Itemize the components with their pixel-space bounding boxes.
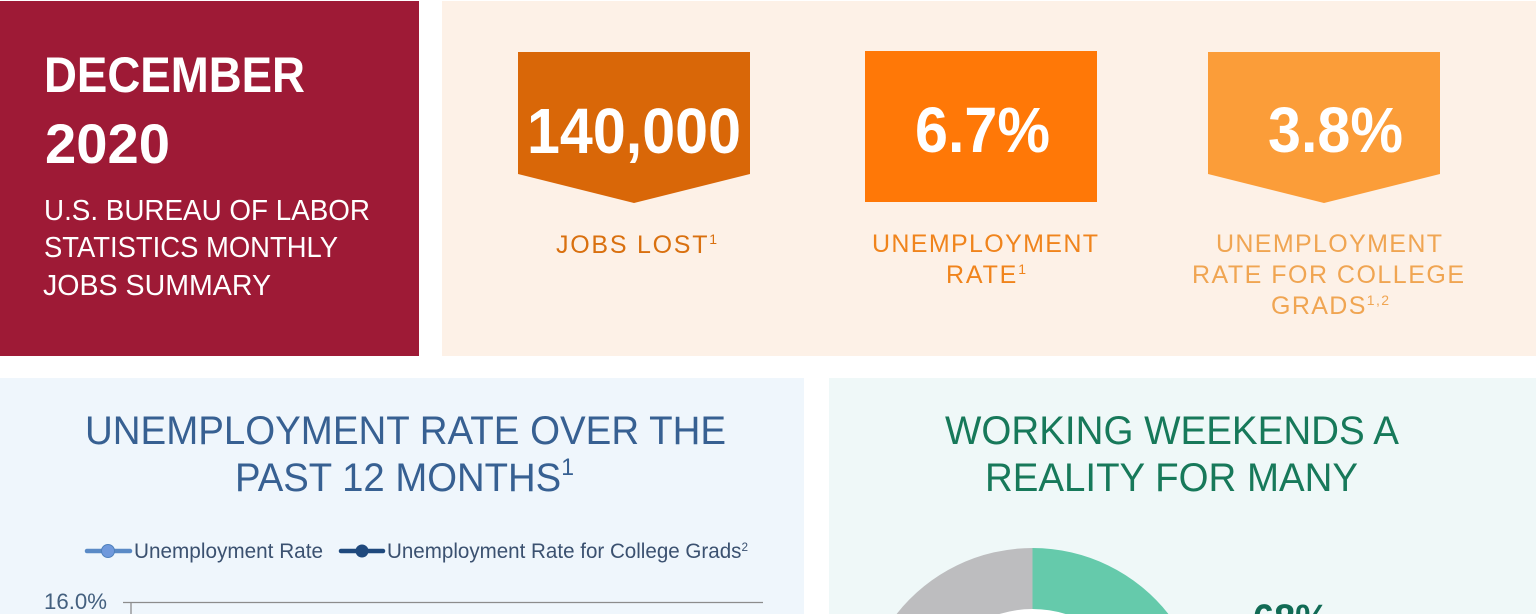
heading: December 2020: 2020 <box>45 112 170 175</box>
stat: jobs lost: 1 <box>709 231 717 247</box>
stat: unemployment rate: UNEMPLOYMENT <box>872 230 1098 258</box>
stat: jobs lost <box>518 52 750 259</box>
heading: working weekends a reality for many: WORKING WEEKENDS A <box>945 409 1399 453</box>
stat: unemployment rate for college grads: 1,2 <box>1367 292 1389 308</box>
heading: December 2020 <box>44 47 305 175</box>
legend: unemployment rate: Unemployment Rate <box>134 540 323 563</box>
text block: source description: U.S. BUREAU OF LABOR <box>44 195 370 227</box>
text block: source description: JOBS SUMMARY <box>43 270 271 302</box>
panel: key statistics <box>442 1 1536 356</box>
heading: December 2020: DECEMBER <box>44 47 305 103</box>
heading: working weekends a reality for many <box>945 409 1399 500</box>
text block: source description <box>43 195 370 302</box>
chart legend <box>87 540 748 563</box>
legend: unemployment rate for college grads: 2 <box>741 540 748 554</box>
heading: working weekends a reality for many: REALITY FOR MANY <box>985 456 1358 500</box>
heading: unemployment rate over the past 12 months: UNEMPLOYMENT RATE OVER THE <box>85 409 726 453</box>
stat: unemployment rate for college grads: GRADS <box>1271 292 1365 320</box>
panel: unemployment rate chart <box>0 378 804 614</box>
heading: unemployment rate over the past 12 months: PAST 12 MONTHS <box>235 456 576 500</box>
stat: unemployment rate for college grads <box>1192 52 1464 320</box>
stat: unemployment rate: 1 <box>1018 261 1026 277</box>
legend: unemployment rate for college grads: Unemployment Rate for College Grads <box>387 540 749 563</box>
donut chart <box>897 548 1168 614</box>
panel: report title <box>0 1 419 356</box>
stat: jobs lost: JOBS LOST <box>556 231 707 259</box>
stat: unemployment rate for college grads: 3.8% <box>1268 94 1403 166</box>
heading: unemployment rate over the past 12 months <box>85 409 726 500</box>
stat: unemployment rate for college grads: UNEMPLOYMENT <box>1216 230 1442 258</box>
stat: unemployment rate: 6.7% <box>915 94 1050 166</box>
stat: unemployment rate <box>865 51 1098 289</box>
text block: source description: STATISTICS MONTHLY <box>44 232 338 264</box>
stat: unemployment rate for college grads: RATE FOR COLLEGE <box>1192 261 1464 289</box>
chart axis: 16.0% <box>44 589 107 614</box>
heading: unemployment rate over the past 12 months: 1 <box>561 454 574 481</box>
stat: jobs lost: 140,000 <box>527 95 741 167</box>
panel: working weekends <box>829 378 1536 614</box>
stat: unemployment rate: RATE <box>946 261 1016 289</box>
